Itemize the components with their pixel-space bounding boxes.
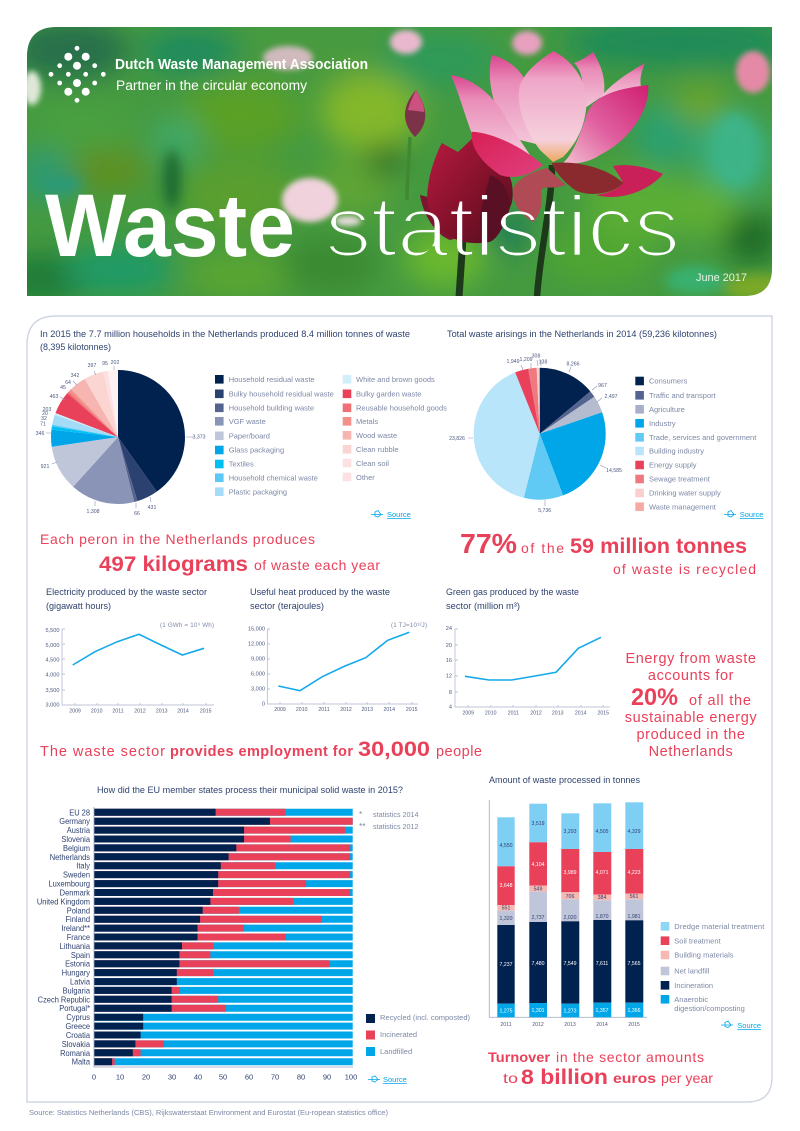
heading: sector (million m³) — [446, 601, 520, 611]
source link — [724, 510, 763, 519]
pie value labels: 1,209 — [520, 357, 533, 363]
axis labels: 2013 — [552, 710, 564, 716]
heading: (8,395 kilotonnes) — [40, 342, 111, 352]
axis labels: 2015 — [598, 710, 609, 716]
callout: turnover 8 billion euros — [488, 1049, 713, 1089]
source link: Source — [737, 1021, 761, 1030]
country labels: Portugal* — [59, 1004, 90, 1013]
axes — [455, 629, 610, 707]
tagline: Partner in the circular economy — [116, 78, 307, 93]
country labels: Slovakia — [62, 1039, 90, 1049]
country labels: France — [67, 933, 90, 942]
legend: Anaerobic — [674, 995, 708, 1004]
percentage axis labels: 40 — [194, 1072, 202, 1082]
legend: Sewage treatment — [649, 475, 711, 484]
heading — [40, 329, 410, 352]
country labels: Denmark — [60, 888, 91, 898]
callout: 77% recycled — [460, 528, 756, 577]
country labels: Sweden — [63, 870, 90, 880]
legend: Household chemical waste — [229, 474, 318, 482]
percentage axis labels: 100 — [345, 1072, 357, 1082]
pie value labels: 20 — [42, 411, 48, 417]
year labels: 2013 — [564, 1022, 576, 1028]
axis labels: 2010 — [296, 707, 308, 713]
percentage axis labels: 10 — [116, 1072, 124, 1082]
legend: Industry — [649, 419, 676, 428]
callout: 497 kilograms per person — [40, 531, 380, 576]
country labels: Netherlands — [50, 852, 90, 862]
country labels: Latvia — [70, 977, 90, 987]
column 2015: 4,329 — [628, 829, 641, 835]
legend: Glass packaging — [229, 446, 284, 455]
heading: (gigawatt hours) — [46, 601, 111, 611]
callout: 77% recycled: 77% — [460, 528, 517, 559]
callout: turnover 8 billion euros: to — [503, 1070, 518, 1086]
small bud — [405, 90, 425, 137]
country labels: Belgium — [63, 843, 90, 853]
column 2014: 4,071 — [596, 870, 609, 876]
pie value labels: 431 — [148, 505, 156, 511]
legend — [215, 375, 447, 496]
axis labels: 2012 — [530, 710, 542, 716]
legend: Other — [356, 473, 375, 482]
axis labels — [46, 628, 212, 714]
callout: energy from waste 20%: 20% — [631, 684, 678, 711]
heading: Electricity produced by the waste sector — [46, 587, 207, 597]
country labels: Italy — [76, 861, 90, 871]
note: (1 GWh = 10⁹ Wh) — [160, 622, 214, 629]
pie value labels — [449, 354, 622, 514]
axis labels: 2014 — [177, 708, 189, 714]
country labels: Spain — [71, 950, 90, 960]
pie chart — [84, 404, 152, 470]
axis labels: 5,500 — [46, 628, 60, 634]
chart: electricity line chart — [46, 587, 214, 714]
legend: Building materials — [674, 951, 734, 960]
axis labels: 2009 — [274, 707, 286, 713]
callout: employment 30,000: 30,000 — [358, 738, 430, 761]
callout: energy from waste 20%: Energy from waste — [625, 651, 757, 667]
column 2012: 4,104 — [532, 862, 545, 868]
column 2014: 384 — [598, 895, 606, 901]
pie value labels: 95 — [102, 361, 108, 367]
country labels: Slovenia — [61, 835, 90, 844]
column 2012: 3,519 — [532, 821, 545, 827]
column 2015: 561 — [630, 894, 638, 900]
column 2015: 7,565 — [628, 961, 641, 967]
pie value labels — [36, 360, 206, 517]
heading: In 2015 the 7.7 million households in the Netherlands produced 8.4 million tonnes of waste — [40, 329, 410, 339]
axis labels: 9,000 — [251, 656, 265, 662]
hero photo: lotus pond — [27, 27, 772, 296]
country labels: Estonia — [65, 959, 90, 969]
callout: 77% recycled: of the — [521, 540, 564, 556]
legend: Recycled (incl. composted) — [380, 1013, 470, 1022]
legend: Bulky garden waste — [356, 390, 421, 398]
pie value labels: 342 — [71, 373, 79, 379]
callout: turnover 8 billion euros: Turnover — [488, 1049, 551, 1065]
axis labels: 4,000 — [46, 672, 60, 678]
axis labels: 2010 — [91, 708, 103, 714]
footer: source note: Source: Statistics Netherlands (CBS), Rijkswaterstaat Environment and Eurostat (Eu-ropean statistics office) — [29, 1108, 388, 1117]
axes — [62, 629, 214, 705]
column 2013: 7,549 — [564, 961, 577, 967]
heading: How did the EU member states process their municipal solid waste in 2015? — [97, 785, 403, 795]
pie value labels: 8,266 — [567, 362, 580, 368]
pie value labels: 967 — [598, 383, 607, 389]
panel: household waste pie — [36, 329, 447, 519]
legend — [366, 1013, 470, 1056]
column 2014: 1,870 — [596, 914, 609, 920]
column 2014: 4,505 — [596, 829, 609, 835]
percentage axis labels: 20 — [142, 1072, 150, 1082]
column 2011: 1,275 — [500, 1008, 513, 1014]
axes — [489, 800, 647, 1017]
column 2013: 706 — [566, 894, 574, 900]
axis labels: 3,000 — [46, 702, 60, 708]
legend: Wood waste — [356, 431, 397, 440]
axis labels: 2013 — [156, 708, 168, 714]
axis labels: 0 — [262, 702, 265, 708]
column 2011: 7,237 — [500, 962, 513, 968]
pie value labels: 308 — [532, 354, 540, 360]
source link — [368, 1075, 407, 1084]
legend: Building industry — [649, 447, 704, 456]
callout: 497 kilograms per person: of waste each year — [254, 557, 380, 573]
axis labels: 8 — [449, 690, 452, 696]
pie chart — [507, 401, 573, 467]
source link: Source — [740, 510, 763, 519]
column 2013: 2,020 — [564, 915, 577, 921]
line — [465, 637, 601, 680]
title: Waste statistics: Waste — [45, 175, 295, 275]
pie value labels: 346 — [36, 431, 44, 437]
legend: Energy supply — [649, 461, 697, 470]
column 2012: 7,480 — [532, 961, 545, 967]
pie value labels: 32 — [41, 416, 47, 422]
legend: Landfilled — [380, 1047, 412, 1056]
column 2013: 1,273 — [564, 1008, 577, 1014]
pie value labels: 14,585 — [606, 468, 622, 474]
axis labels: 12,000 — [248, 642, 265, 648]
legend: Soil treatment — [674, 936, 721, 945]
legend: Household building waste — [229, 404, 314, 412]
year labels: 2015 — [628, 1022, 640, 1028]
callout: energy from waste 20% — [625, 651, 757, 760]
legend — [661, 922, 765, 1013]
axis labels: 2009 — [69, 708, 81, 714]
panel: total waste arisings pie — [447, 329, 763, 519]
pie value labels: 64 — [65, 380, 71, 386]
country labels: Ireland** — [61, 924, 90, 933]
legend: digestion/composting — [674, 1004, 745, 1013]
legend: Reusable household goods — [356, 404, 447, 412]
legend: Waste management — [649, 502, 717, 511]
percentage axis labels: 30 — [168, 1072, 176, 1082]
callout: 497 kilograms per person: Each peron in the Netherlands produces — [40, 531, 315, 547]
pie value labels: 463 — [50, 394, 58, 400]
pie value labels: 66 — [134, 511, 140, 517]
chart: useful heat line chart — [248, 587, 427, 713]
country labels: United Kingdom — [37, 897, 90, 907]
footnotes: * — [359, 809, 363, 819]
callout: energy from waste 20%: Netherlands — [649, 744, 733, 760]
heading — [250, 587, 390, 611]
percentage axis labels: 80 — [297, 1072, 305, 1082]
legend: Traffic and transport — [649, 391, 717, 400]
logo: Dutch Waste Management Association — [49, 46, 106, 103]
organisation name: Dutch Waste Management Association — [115, 57, 368, 73]
column 2014: 1,357 — [596, 1008, 609, 1014]
stems — [407, 137, 410, 200]
heading: Useful heat produced by the waste — [250, 587, 390, 597]
line — [73, 634, 204, 665]
column 2013 — [561, 813, 579, 1017]
axis labels: 2009 — [463, 710, 474, 716]
pie value labels: 45 — [60, 385, 66, 391]
percentage axis labels: 90 — [323, 1072, 331, 1082]
axis labels: 2012 — [340, 707, 352, 713]
pie value labels: 23,826 — [449, 436, 465, 442]
callout: 497 kilograms per person: 497 kilograms — [99, 553, 248, 576]
legend: Paper/board — [229, 432, 270, 440]
axis labels: 20 — [446, 643, 452, 649]
country labels: Luxembourg — [48, 879, 90, 889]
callout: turnover 8 billion euros: in the sector amounts — [556, 1049, 704, 1065]
legend: Incineration — [674, 981, 713, 990]
chart: EU municipal solid waste stacked bars — [37, 785, 471, 1084]
axis labels: 2010 — [485, 710, 497, 716]
source link — [721, 1021, 761, 1030]
legend: Agriculture — [649, 405, 685, 414]
source link: Source — [383, 1075, 407, 1084]
axis labels: 15,000 — [248, 626, 265, 632]
column 2011: 3,648 — [500, 883, 513, 889]
column 2012 — [529, 804, 547, 1017]
axis labels: 5,000 — [46, 643, 60, 649]
pie value labels: 138 — [539, 360, 547, 366]
country labels: Croatia — [66, 1031, 90, 1040]
pie value labels: 1,949 — [507, 359, 520, 365]
legend: Dredge material treatment — [674, 922, 765, 931]
column 2011: 4,550 — [500, 843, 513, 849]
callout: employment 30,000: people — [436, 744, 482, 760]
country labels: Finland — [65, 915, 90, 924]
column 2013: 3,293 — [564, 829, 577, 835]
axis labels: 4,500 — [46, 658, 60, 664]
heading — [46, 587, 207, 611]
pie value labels: 2,497 — [605, 394, 618, 400]
legend: Clean rubble — [356, 445, 399, 454]
axis labels: 24 — [446, 626, 452, 632]
pie value labels: 1,308 — [87, 509, 100, 515]
axis labels: 3,500 — [46, 688, 60, 694]
legend: Household residual waste — [229, 375, 315, 384]
axis labels — [248, 626, 418, 713]
legend: Clean soil — [356, 459, 389, 468]
heading: Green gas produced by the waste — [446, 587, 579, 597]
country labels: Malta — [72, 1057, 90, 1067]
callout: 77% recycled: of waste is recycled — [613, 561, 756, 577]
country labels: Germany — [59, 817, 90, 826]
axes — [267, 629, 418, 704]
column 2013: 3,989 — [564, 870, 577, 876]
percentage axis labels: 70 — [271, 1072, 279, 1082]
column 2015: 1,981 — [628, 914, 641, 920]
axes — [94, 807, 353, 1067]
country labels: Bulgaria — [63, 986, 90, 996]
note: (1 TJ=10¹²J) — [391, 622, 427, 629]
column 2015: 4,223 — [628, 870, 641, 876]
legend — [635, 377, 757, 511]
country labels: Hungary — [62, 968, 90, 978]
legend: Plastic packaging — [229, 488, 287, 496]
lotus flower petals — [490, 55, 540, 145]
axis labels — [446, 626, 609, 716]
pie value labels: 397 — [88, 363, 96, 369]
year labels: 2012 — [532, 1022, 544, 1028]
column 2011 — [497, 817, 515, 1017]
axis labels: 12 — [446, 674, 452, 680]
bud — [420, 195, 455, 240]
axis labels: 3,000 — [251, 686, 265, 692]
pie value labels: 71 — [40, 422, 46, 428]
country labels: Poland — [67, 906, 90, 915]
callout: energy from waste 20%: sustainable energy — [625, 710, 757, 726]
year labels: 2011 — [500, 1022, 512, 1028]
callout: turnover 8 billion euros: per year — [661, 1070, 713, 1086]
legend: Consumers — [649, 377, 688, 386]
pie value labels: 203 — [43, 407, 51, 413]
country labels: Greece — [66, 1022, 90, 1031]
percentage axis labels — [92, 1072, 357, 1082]
callout: turnover 8 billion euros: euros — [613, 1070, 656, 1086]
source link: Source — [387, 510, 411, 519]
pie value labels: 3,373 — [193, 434, 206, 440]
country labels: EU 28 — [69, 808, 90, 817]
axis labels: 4 — [449, 705, 452, 711]
column 2012: 2,737 — [532, 915, 545, 921]
line — [278, 632, 409, 691]
legend: White and brown goods — [356, 375, 435, 384]
footnotes: ** — [359, 821, 366, 831]
year labels — [500, 1022, 640, 1028]
axis labels: 2011 — [112, 708, 124, 714]
callout: energy from waste 20%: produced in the — [637, 727, 745, 743]
heading: Total waste arisings in the Netherlands in 2014 (59,236 kilotonnes) — [447, 329, 717, 339]
axis labels: 2014 — [575, 710, 587, 716]
axis labels: 2015 — [406, 707, 418, 713]
legend: Metals — [356, 417, 378, 426]
callout: employment 30,000: The waste sector — [40, 744, 165, 760]
date: June 2017 — [696, 272, 747, 284]
column 2015: 1,366 — [628, 1008, 641, 1014]
callout: energy from waste 20%: accounts for — [648, 668, 734, 684]
axis labels: 16 — [446, 658, 452, 664]
column 2014 — [593, 803, 611, 1017]
column 2015 — [625, 802, 643, 1017]
axis labels: 6,000 — [251, 672, 265, 678]
pie value labels: 5,736 — [538, 508, 551, 514]
callout: employment 30,000 — [40, 738, 482, 761]
axis labels: 2015 — [200, 708, 212, 714]
country labels: Lithuania — [60, 941, 90, 951]
percentage axis labels: 0 — [92, 1072, 96, 1082]
callout: energy from waste 20%: of all the — [689, 693, 751, 709]
title: Waste statistics — [45, 175, 680, 275]
heading: Amount of waste processed in tonnes — [489, 775, 640, 785]
column 2012: 549 — [534, 886, 542, 892]
footnotes — [359, 809, 419, 831]
title: Waste statistics: statistics — [325, 179, 680, 275]
axis labels: 2012 — [134, 708, 146, 714]
axis labels: 2011 — [508, 710, 519, 716]
chart: green gas line chart — [446, 587, 610, 716]
source link — [371, 510, 411, 519]
pie value labels: 921 — [41, 464, 49, 470]
legend: Incinerated — [380, 1030, 417, 1039]
pie value labels: 202 — [111, 360, 119, 366]
callout: turnover 8 billion euros: 8 billion — [521, 1066, 608, 1089]
country labels: Austria — [67, 826, 90, 835]
main panel border — [27, 316, 772, 1102]
legend: Textiles — [229, 460, 254, 469]
callout: employment 30,000: provides employment for — [170, 744, 353, 760]
country labels: Romania — [60, 1048, 90, 1058]
country labels: Czech Republic — [38, 995, 90, 1004]
column 2011: 551 — [502, 906, 510, 912]
footnotes: statistics 2014 — [373, 810, 419, 819]
country labels — [37, 808, 91, 1067]
footnotes: statistics 2012 — [373, 822, 419, 831]
column 2012: 1,301 — [532, 1008, 545, 1014]
column 2011: 1,320 — [500, 916, 513, 922]
percentage axis labels: 60 — [245, 1072, 253, 1082]
bars — [94, 809, 353, 1065]
callout: 77% recycled: 59 million tonnes — [570, 535, 747, 558]
heading: sector (terajoules) — [250, 601, 324, 611]
legend: VGF waste — [229, 417, 266, 426]
legend: Trade, services and government — [649, 433, 757, 442]
legend: Drinking water supply — [649, 489, 721, 498]
legend: Net landfill — [674, 967, 710, 976]
year labels: 2014 — [596, 1022, 608, 1028]
legend: Bulky household residual waste — [229, 390, 334, 398]
axis labels: 2014 — [384, 707, 395, 713]
column 2014: 7,611 — [596, 961, 608, 967]
heading — [446, 587, 579, 611]
country labels: Cyprus — [66, 1013, 90, 1022]
axis labels: 2013 — [362, 707, 373, 713]
axis labels: 2011 — [318, 707, 330, 713]
percentage axis labels: 50 — [219, 1072, 227, 1082]
chart: waste processed in tonnes stacked columns — [489, 775, 765, 1030]
